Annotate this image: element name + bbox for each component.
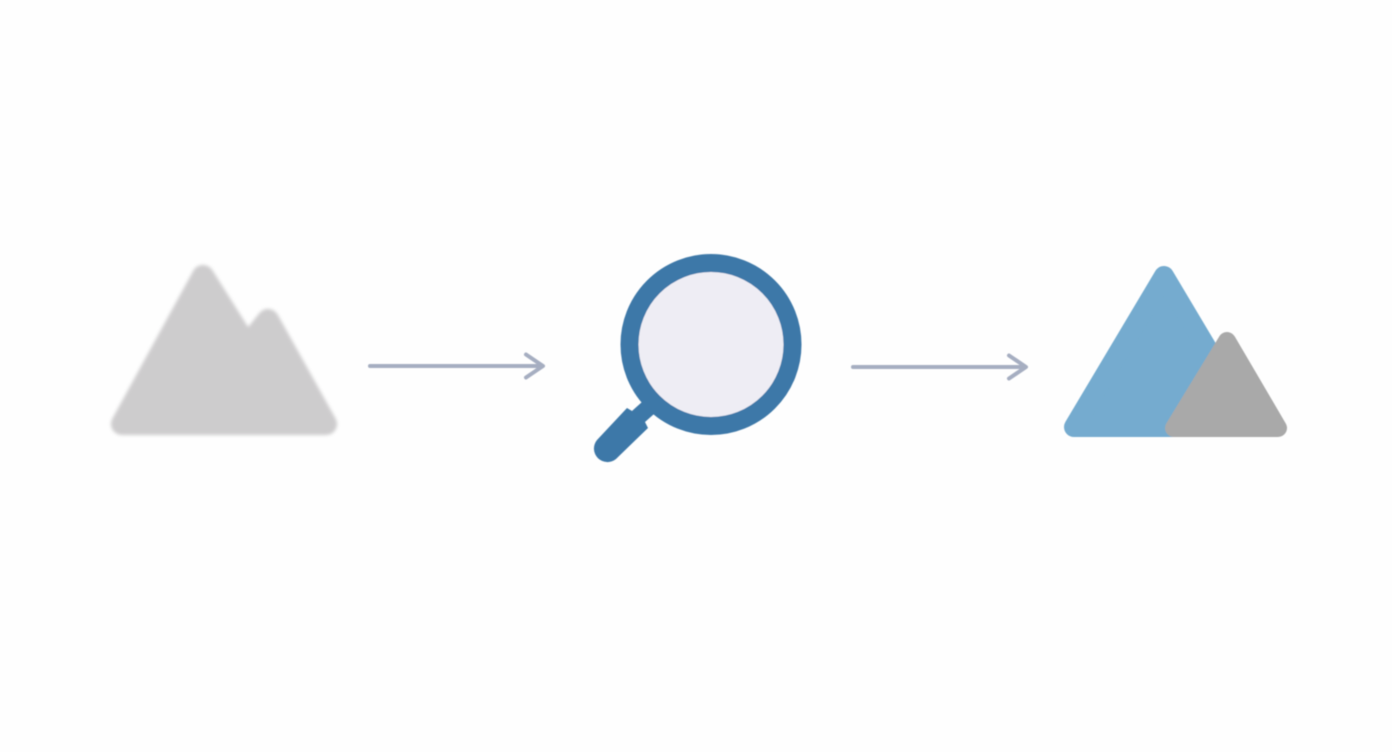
icon: sharp mountains — [1074, 276, 1278, 428]
magnifier handle — [594, 402, 654, 462]
icon: magnifying glass — [594, 263, 792, 462]
icon: blurry mountain — [122, 276, 326, 424]
arrow: blurry image to magnifier — [370, 354, 543, 378]
magnifier lens — [630, 263, 792, 426]
arrow: magnifier to sharp image — [853, 356, 1026, 378]
small gray peak — [1174, 341, 1278, 428]
large blue peak — [1074, 276, 1254, 427]
